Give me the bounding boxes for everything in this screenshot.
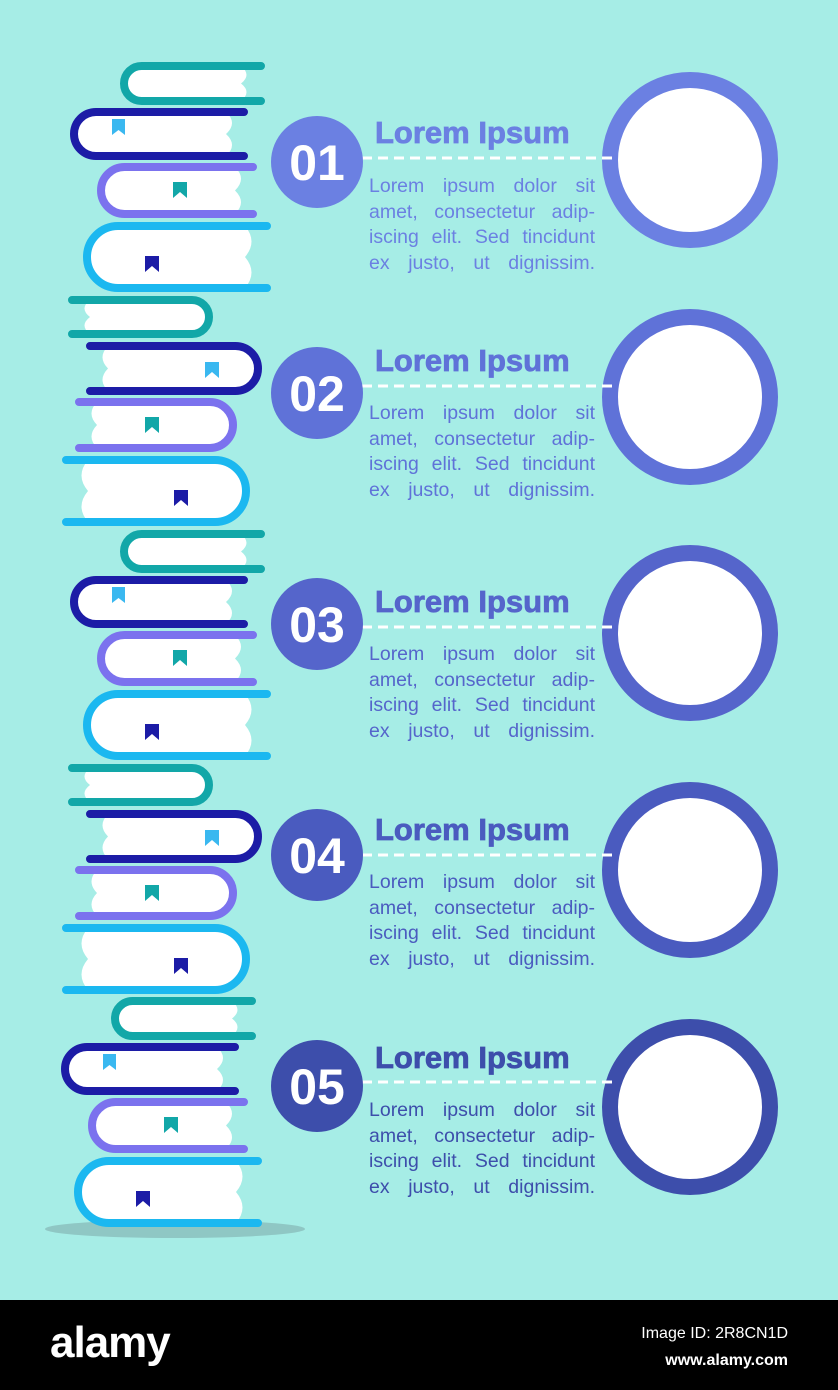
step 2 text — [369, 402, 595, 501]
ring 3 — [610, 553, 770, 713]
ring 4 — [610, 790, 770, 950]
footer id text — [641, 1325, 788, 1369]
book group 2 — [66, 300, 258, 522]
step 3 text: ex justo, ut dignissim. — [369, 720, 595, 742]
book group 1 — [74, 66, 267, 288]
step 3 text: iscing elit. Sed tincidunt — [369, 694, 595, 716]
book group 3 — [74, 534, 267, 756]
footer band — [0, 1300, 838, 1390]
step 5 text: amet, consectetur adip- — [369, 1125, 595, 1147]
dashed connectors — [362, 158, 612, 1082]
footer logo: alamy — [50, 1318, 170, 1367]
ring 2 — [610, 317, 770, 477]
step 4 text: iscing elit. Sed tincidunt — [369, 922, 595, 944]
footer id text: Image ID: 2R8CN1D — [641, 1325, 788, 1342]
step 3 text: Lorem ipsum dolor sit — [369, 643, 595, 665]
footer id text: www.alamy.com — [665, 1352, 788, 1369]
step 4 text: amet, consectetur adip- — [369, 897, 595, 919]
step 4 text: ex justo, ut dignissim. — [369, 948, 595, 970]
step 3 title: Lorem Ipsum — [375, 584, 570, 619]
step 1 text: amet, consectetur adip- — [369, 201, 595, 223]
number badges: 02 — [289, 366, 345, 422]
step 4 title: Lorem Ipsum — [375, 812, 570, 847]
book group 5 — [65, 1001, 258, 1223]
step 4 text: Lorem ipsum dolor sit — [369, 871, 595, 893]
step 3 text — [369, 643, 595, 742]
step 1 text: ex justo, ut dignissim. — [369, 252, 595, 274]
shadow under stack — [45, 1220, 305, 1238]
step 5 text: Lorem ipsum dolor sit — [369, 1099, 595, 1121]
number badges: 05 — [289, 1059, 345, 1115]
ring 5 — [610, 1027, 770, 1187]
step 5 text: ex justo, ut dignissim. — [369, 1176, 595, 1198]
number badges: 03 — [289, 597, 345, 653]
step 2 title: Lorem Ipsum — [375, 343, 570, 378]
ring 1 — [610, 80, 770, 240]
step 5 title: Lorem Ipsum — [375, 1040, 570, 1075]
step 3 text: amet, consectetur adip- — [369, 669, 595, 691]
step 2 text: iscing elit. Sed tincidunt — [369, 453, 595, 475]
number badges: 04 — [289, 828, 345, 884]
step 1 text: iscing elit. Sed tincidunt — [369, 226, 595, 248]
book group 4 — [66, 768, 258, 990]
step 1 title: Lorem Ipsum — [375, 115, 570, 150]
step 4 text — [369, 871, 595, 970]
step 5 text: iscing elit. Sed tincidunt — [369, 1150, 595, 1172]
step 2 text: amet, consectetur adip- — [369, 428, 595, 450]
number badges — [271, 116, 363, 1132]
step 1 text — [369, 175, 595, 274]
step 1 text: Lorem ipsum dolor sit — [369, 175, 595, 197]
step 2 text: ex justo, ut dignissim. — [369, 479, 595, 501]
number badges: 01 — [289, 135, 345, 191]
step 5 text — [369, 1099, 595, 1198]
step 2 text: Lorem ipsum dolor sit — [369, 402, 595, 424]
